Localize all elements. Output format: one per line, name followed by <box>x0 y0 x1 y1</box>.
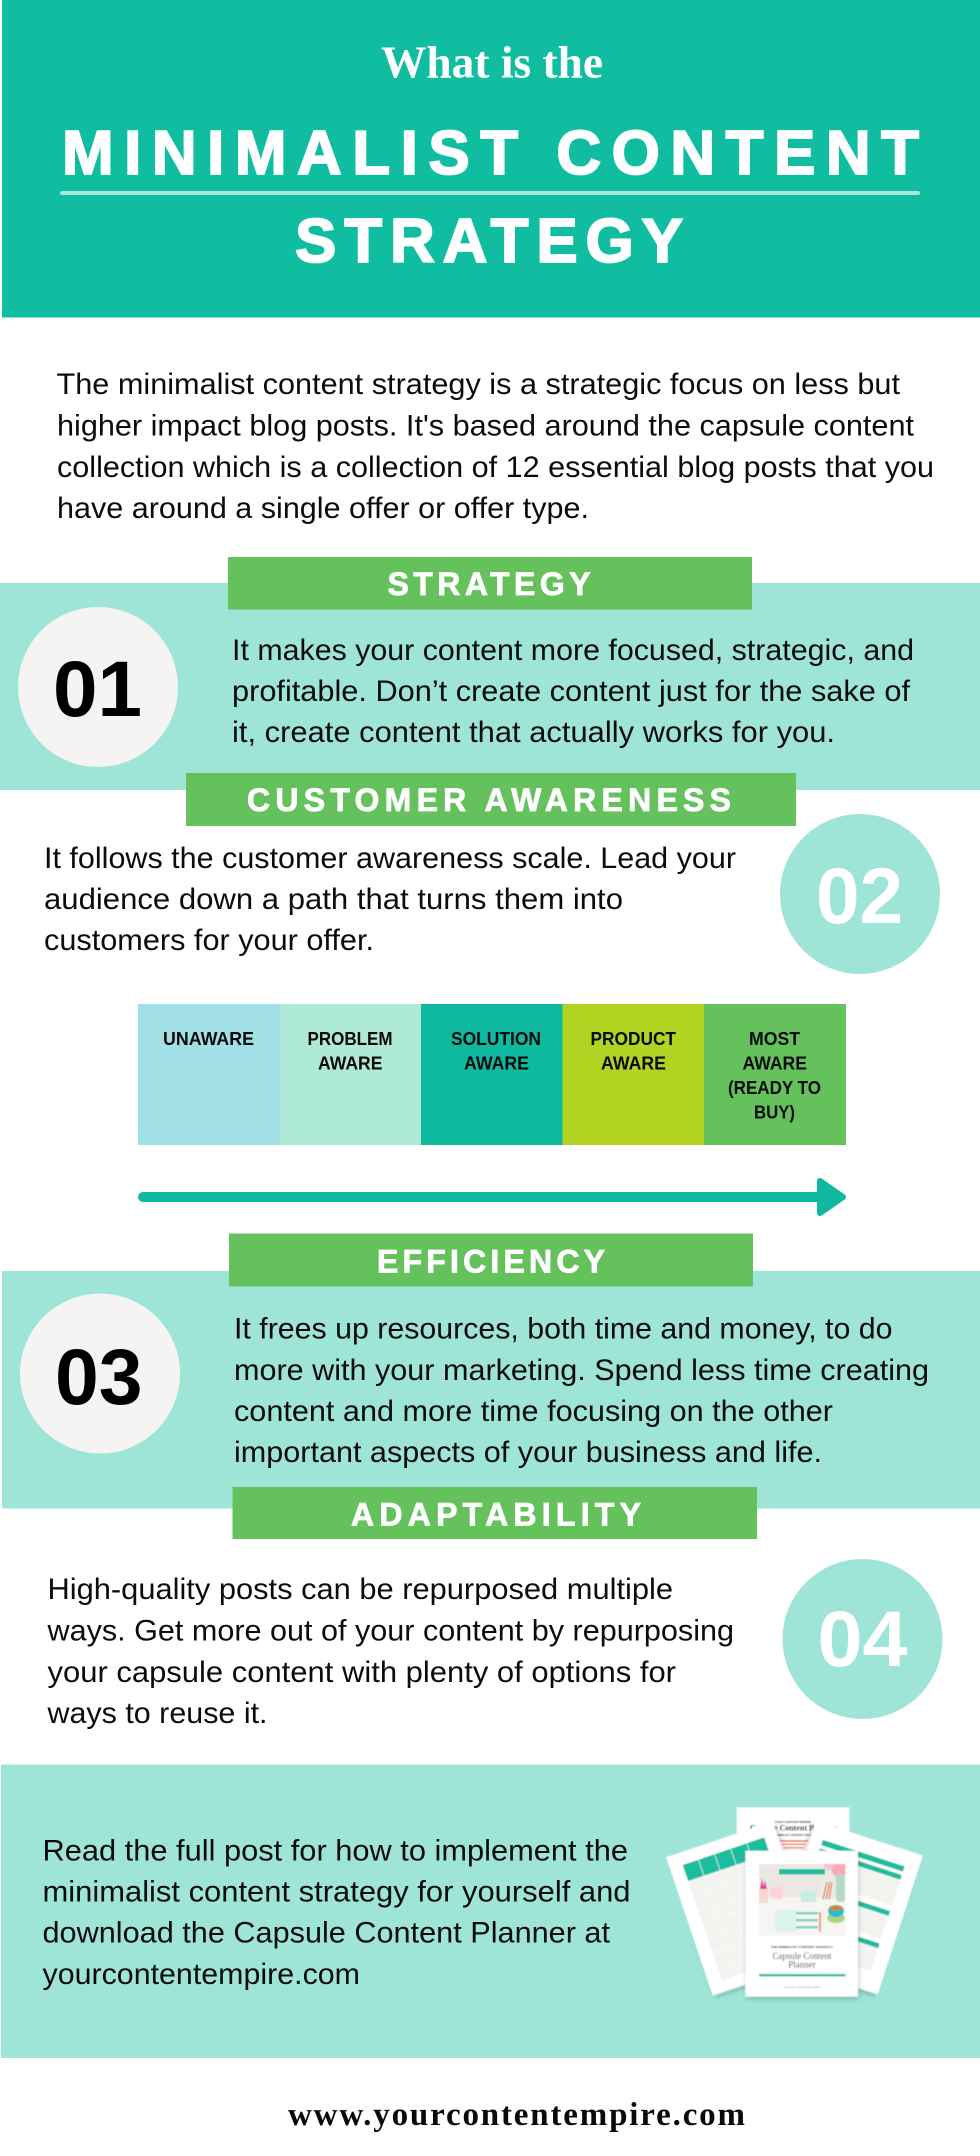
header banner <box>2 0 980 318</box>
customer awareness text: customers for your offer. <box>44 924 374 957</box>
strategy text <box>232 634 914 749</box>
strategy text: it, create content that actually works for you. <box>232 716 835 749</box>
number circle 04 <box>782 1559 942 1719</box>
customer awareness text <box>44 842 736 957</box>
number circle 02 <box>780 814 940 974</box>
call to action text: minimalist content strategy for yourself and <box>42 1876 630 1908</box>
title: strategy: STRATEGY <box>295 207 683 276</box>
efficiency text: It frees up resources, both time and money, to do <box>234 1312 892 1346</box>
number circle 01 <box>18 607 178 767</box>
number circle 01: 01 <box>53 644 142 733</box>
adaptability text: your capsule content with plenty of options for <box>48 1656 676 1689</box>
stage: problem aware: AWARE <box>318 1054 382 1074</box>
intro paragraph: higher impact blog posts. It's based around the capsule content <box>57 410 914 442</box>
customer awareness text: audience down a path that turns them into <box>44 883 623 916</box>
stage: product aware: PRODUCT <box>590 1029 676 1049</box>
stage: most aware <box>704 1004 846 1145</box>
intro paragraph: The minimalist content strategy is a strategic focus on less but <box>56 368 900 401</box>
planner right page <box>768 1820 923 1997</box>
stage: solution aware: SOLUTION <box>451 1029 541 1049</box>
strategy text: It makes your content more focused, strategic, and <box>232 634 914 667</box>
number circle 03: 03 <box>55 1332 142 1421</box>
adaptability text: ways to reuse it. <box>46 1697 268 1730</box>
heading: efficiency: EFFICIENCY <box>377 1244 605 1280</box>
stage: product aware: AWARE <box>601 1054 666 1074</box>
planner back page: THE MINIMALIST CONTENT STRATEGY <box>769 1833 818 1837</box>
adaptability text: High-quality posts can be repurposed multiple <box>48 1573 673 1606</box>
heading: efficiency <box>229 1234 753 1286</box>
call to action text: yourcontentempire.com <box>42 1958 360 1991</box>
heading: strategy: STRATEGY <box>388 566 590 602</box>
panel: 03 efficiency <box>2 1234 980 1508</box>
stage: problem aware: PROBLEM <box>308 1029 392 1049</box>
stage: most aware: (READY TO <box>728 1078 821 1098</box>
stage: unaware <box>138 1004 280 1145</box>
intro paragraph <box>56 368 934 525</box>
stage: unaware: UNAWARE <box>163 1029 254 1049</box>
adaptability text <box>46 1573 734 1730</box>
heading: strategy <box>228 557 752 610</box>
call to action text: Read the full post for how to implement the <box>42 1834 628 1868</box>
customer awareness text: It follows the customer awareness scale. Lead your <box>44 842 736 875</box>
planner front cover: THE MINIMALIST CONTENT STRATEGY <box>771 1945 833 1949</box>
awareness scale chart <box>138 1004 846 1145</box>
panel: 02 customer awareness <box>44 773 940 974</box>
planner back page <box>737 1807 849 1953</box>
heading: adaptability <box>232 1487 757 1539</box>
stage: most aware: BUY) <box>754 1102 795 1122</box>
planner front cover: Capsule Content <box>772 1951 832 1961</box>
image: capsule content planner pages <box>666 1807 923 1999</box>
call to action text: download the Capsule Content Planner at <box>42 1916 610 1950</box>
intro paragraph: have around a single offer or offer type. <box>57 492 589 525</box>
efficiency text <box>234 1312 929 1469</box>
planner front cover <box>745 1851 859 1999</box>
efficiency text: content and more time focusing on the other <box>234 1395 833 1428</box>
stage: product aware <box>562 1004 704 1145</box>
adaptability text: ways. Get more out of your content by repurposing <box>46 1614 734 1648</box>
arrow: awareness progression <box>143 1181 843 1213</box>
panel: 04 adaptability <box>46 1487 942 1730</box>
strategy text: profitable. Don’t create content just for the sake of <box>232 675 911 708</box>
planner front cover: Planner <box>788 1960 816 1970</box>
planner front cover: COPYRIGHT YOUR CONTENT EMPIRE <box>784 1987 821 1989</box>
planner left page <box>666 1821 822 1998</box>
stage: most aware: MOST <box>749 1029 800 1049</box>
planner back page: Capsule Content Planner <box>750 1824 837 1832</box>
heading: adaptability: ADAPTABILITY <box>351 1496 641 1532</box>
number circle 04: 04 <box>818 1594 908 1683</box>
heading: customer awareness: CUSTOMER AWARENESS <box>247 782 731 818</box>
title: what is the: What is the <box>381 38 603 88</box>
number circle 02: 02 <box>816 851 903 940</box>
call to action text <box>42 1834 630 1991</box>
stage: solution aware <box>421 1004 562 1145</box>
title underline <box>60 191 920 195</box>
title: minimalist content: MINIMALIST CONTENT <box>62 119 919 188</box>
panel: call to action <box>1 1764 980 2058</box>
footer website url: www.yourcontentempire.com <box>288 2097 745 2133</box>
intro paragraph: collection which is a collection of 12 essential blog posts that you <box>57 451 934 484</box>
stage: most aware: AWARE <box>742 1054 807 1074</box>
panel: 01 strategy <box>0 557 980 790</box>
stage: problem aware <box>280 1004 421 1145</box>
stage: solution aware: AWARE <box>464 1054 529 1074</box>
heading: customer awareness <box>186 773 796 826</box>
efficiency text: important aspects of your business and life. <box>234 1436 822 1469</box>
efficiency text: more with your marketing. Spend less time creating <box>234 1354 929 1387</box>
cover photo <box>759 1859 849 1936</box>
number circle 03 <box>20 1294 180 1454</box>
planner back page: YOUR CONTENT EMPIRE <box>775 1820 811 1824</box>
